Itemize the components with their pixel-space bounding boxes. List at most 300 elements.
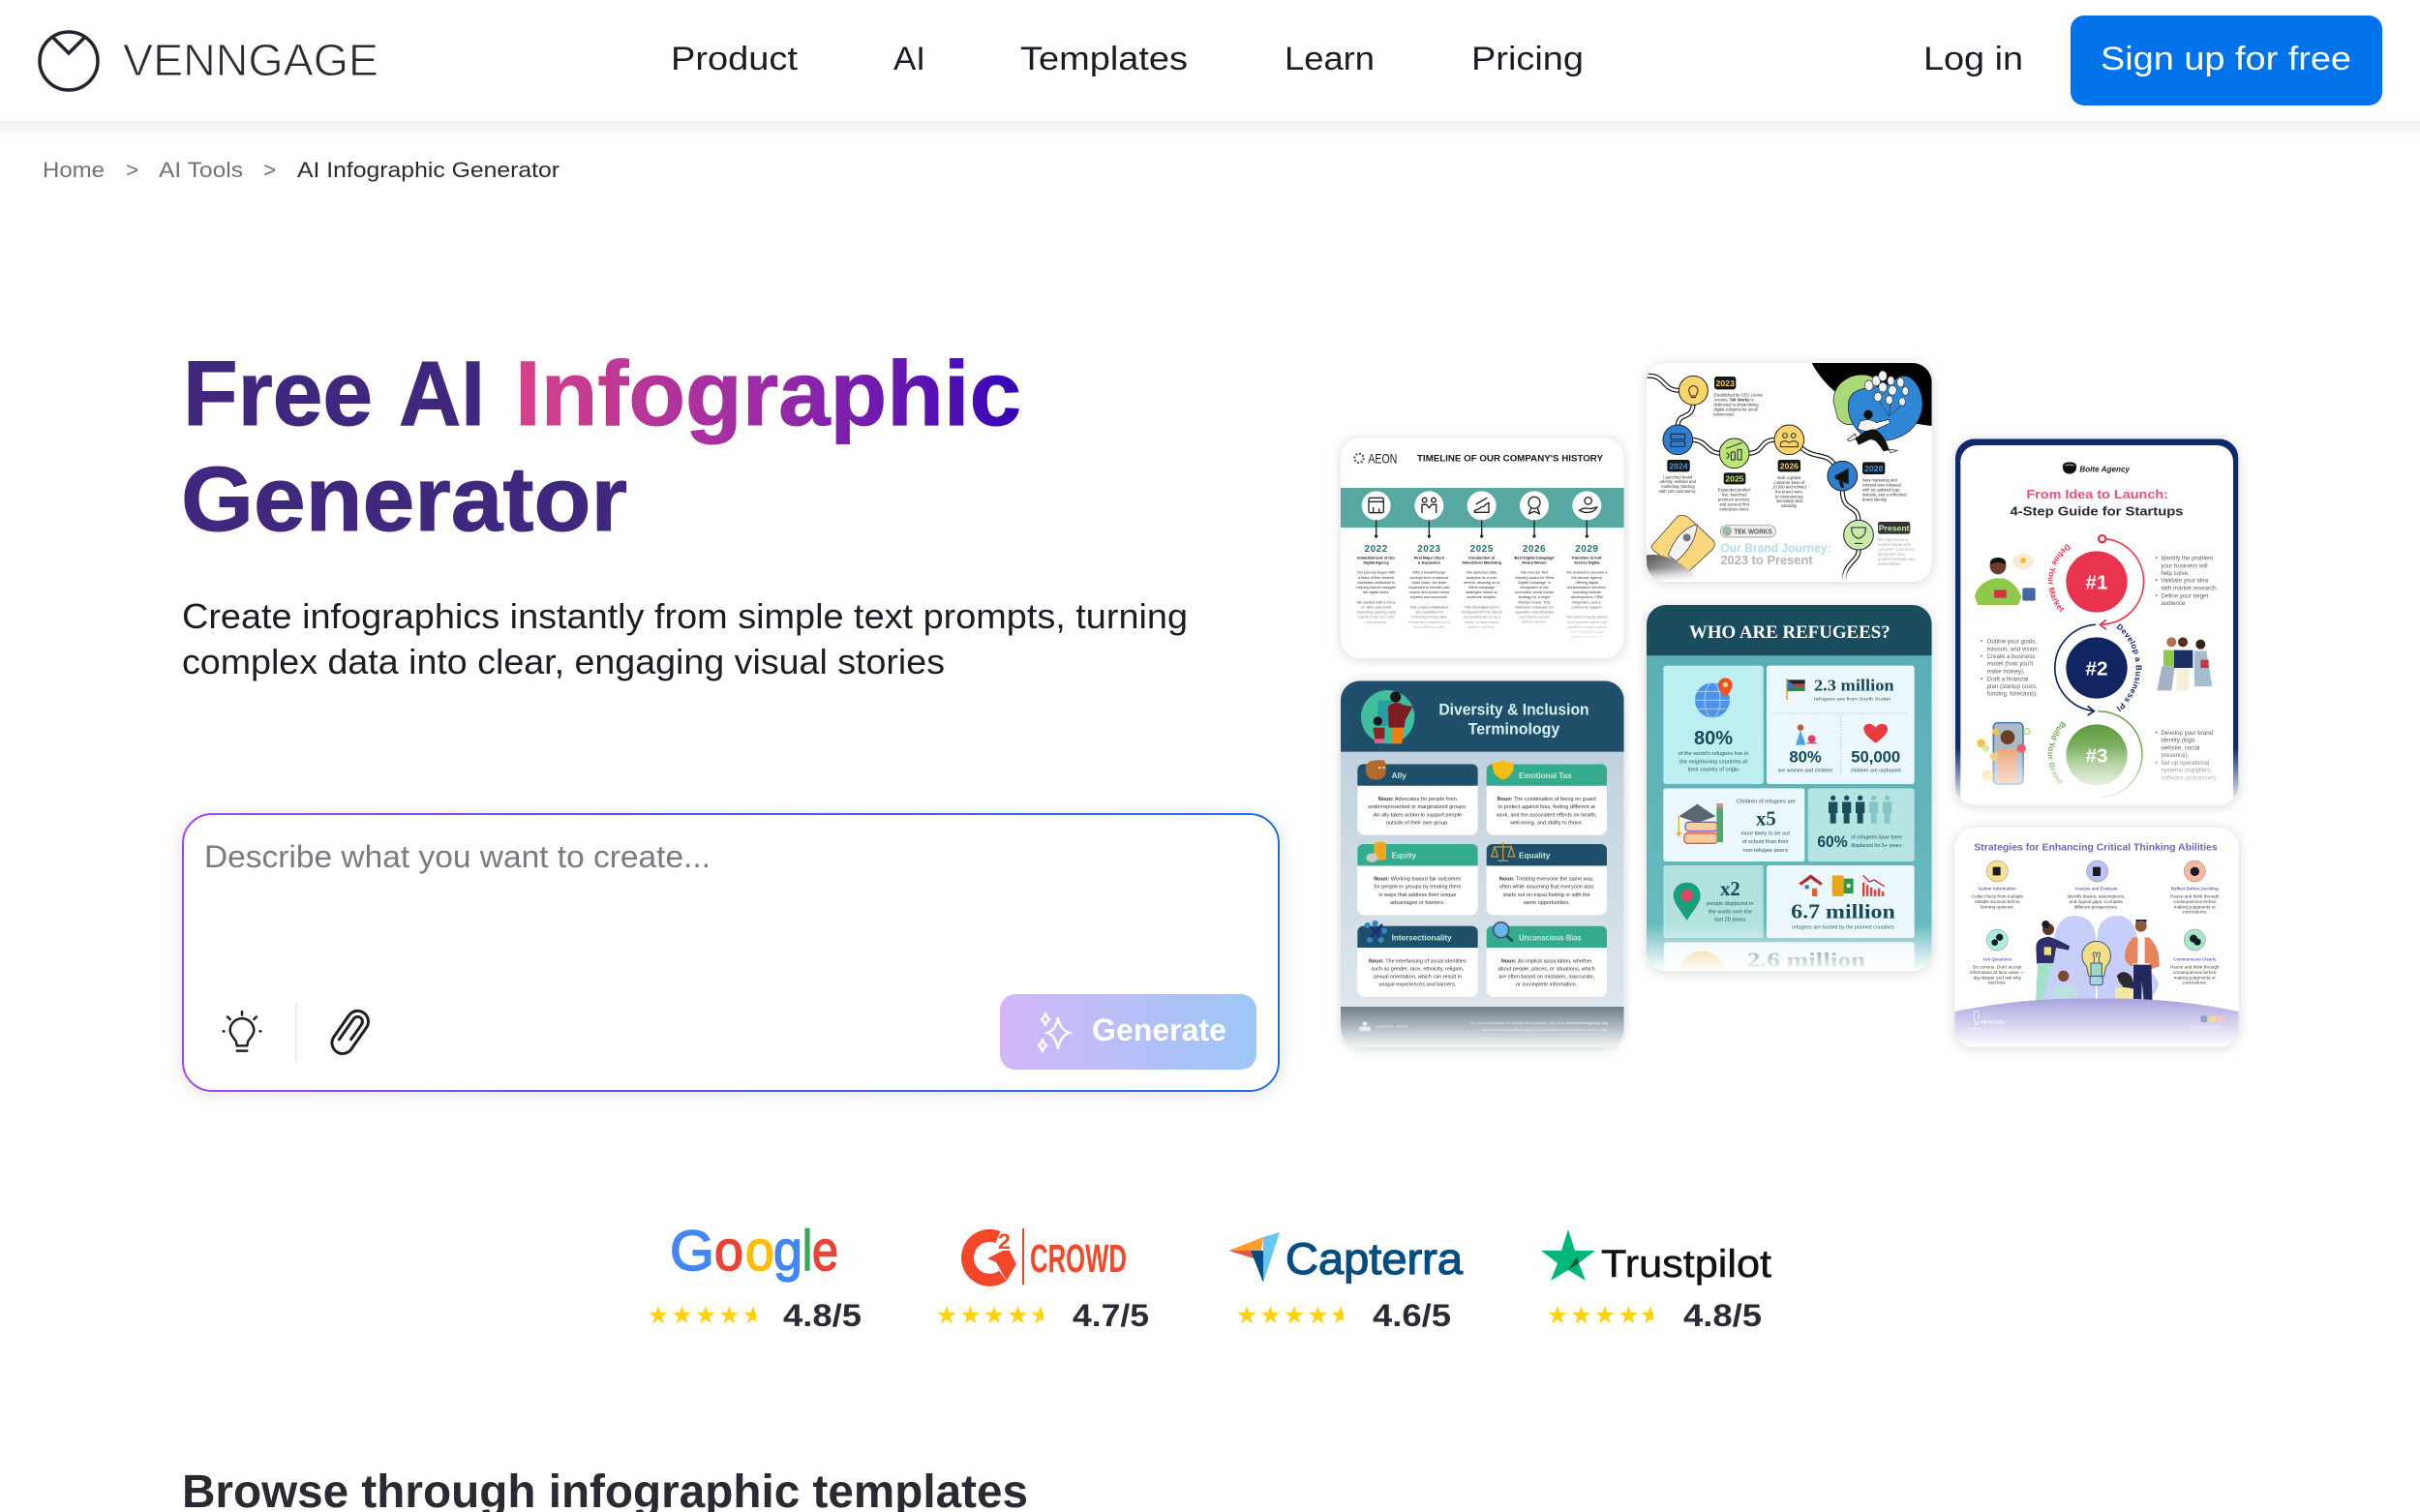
milestone descriptions: Established by CEO Louise <box>1713 393 1764 398</box>
logo: Venngage: VENNGAGE <box>123 35 378 85</box>
icon: light bulb <box>224 1012 260 1051</box>
term cards: Noun: The intertwining of social identities <box>1369 958 1467 964</box>
main navigation links: Pricing <box>1471 41 1584 77</box>
stars <box>649 1306 756 1323</box>
timeline columns: transformation services, <box>1567 586 1607 590</box>
timeline columns: digital marketing. <box>1467 625 1496 629</box>
timeline columns: a team of five creative <box>1358 576 1394 580</box>
timeline columns: our reputation for <box>1415 611 1444 615</box>
panel: critical thinking card: Collect facts from multiple <box>1972 894 2023 899</box>
illustration: man with idea <box>1975 554 2036 605</box>
milestone icons <box>1663 376 1873 550</box>
main navigation links: Product <box>671 41 799 77</box>
panel: critical thinking card: Be curious. Don't accept <box>1973 965 2022 970</box>
card footer: DIVERSITY GROUP <box>1376 1025 1408 1029</box>
timeline columns: Introduction of <box>1468 556 1496 559</box>
stat: 6.7 million hosted: 6.7 million <box>1791 901 1895 922</box>
milestone descriptions: and secured first <box>1719 502 1750 507</box>
milestone descriptions: Recognized as a <box>1878 537 1909 542</box>
card heading: Strategies for Enhancing Critical Thinking Abilities <box>1974 842 2218 853</box>
step bullet lists: Create a business <box>1987 653 2035 660</box>
step bullet lists: software, processes). <box>2161 774 2218 781</box>
panel: critical thinking card: conclusions. <box>2183 910 2207 915</box>
term cards: such as gender, race, ethnicity, religion, <box>1371 966 1465 972</box>
card heading: From Idea to Launch: <box>2026 488 2168 501</box>
milestone descriptions: with an updated logo, <box>1862 488 1901 493</box>
stars <box>1548 1306 1653 1323</box>
panel: critical thinking card <box>1954 828 2239 1047</box>
milestone descriptions: Expanded product <box>1718 488 1751 493</box>
milestone descriptions: website, and a refreshed <box>1862 493 1907 498</box>
timeline columns: offering digital <box>1575 581 1598 585</box>
panel: critical thinking card: information at face value — <box>1970 970 2025 975</box>
card heading: 4-Step Guide for Startups <box>2010 505 2183 519</box>
timeline columns: strategy for a major <box>1519 595 1551 599</box>
step 2: Develop a Business Plan <box>2116 623 2141 712</box>
header navigation bar <box>0 0 2420 142</box>
stat: times five school: Children of refugees are <box>1737 800 1796 805</box>
step bullet lists: model (how you'll <box>1987 661 2033 668</box>
term cards: Emotional Tax <box>1519 771 1572 780</box>
logo: Google: l <box>802 1220 812 1283</box>
stat: South Sudan: are women and children <box>1778 768 1832 773</box>
stat: times two displaced: the world over the <box>1709 909 1752 915</box>
card header: WHO ARE REFUGEES? <box>1689 622 1891 643</box>
illustration: team of three <box>2157 637 2212 690</box>
year labels: 2024 <box>1669 461 1688 470</box>
step 1: #1 <box>2086 571 2107 593</box>
timeline columns: expanded to include paid <box>1408 586 1450 590</box>
term cards: An ally takes action to support people <box>1374 812 1462 818</box>
logo: Google <box>670 1220 838 1283</box>
stat: times five school: non-refugee peers <box>1743 848 1788 854</box>
timeline columns: industry award for 'Best <box>1515 576 1555 580</box>
timeline columns: reputation and attracted <box>1515 610 1554 614</box>
logo: Trustpilot <box>1541 1229 1771 1285</box>
term cards: advantages or barriers. <box>1390 900 1445 906</box>
prompt input panel <box>183 814 1279 1091</box>
score: 4.8/5 <box>783 1298 862 1333</box>
card header <box>1341 680 1624 752</box>
step bullet lists: website, social <box>2160 744 2199 751</box>
timeline columns: analytics as a core <box>1467 576 1497 580</box>
term cards: Ally <box>1392 771 1407 780</box>
timeline columns: With a breakthrough <box>1412 571 1446 575</box>
milestone descriptions: enterprise client. <box>1719 507 1749 512</box>
strategy texts: Gather Information <box>1979 887 2016 892</box>
rating: Capterra <box>1228 1232 1464 1333</box>
step bullet lists: systems (suppliers, <box>2161 768 2212 774</box>
timeline columns: 2022 <box>1365 544 1388 555</box>
milestone descriptions: businesses. <box>1713 412 1735 417</box>
timeline columns: digital environment. <box>1571 635 1603 639</box>
step bullet lists: presence). <box>2161 752 2190 759</box>
main navigation links: Templates <box>1020 41 1188 77</box>
timeline columns: Digital Agency <box>1363 560 1390 564</box>
timeline columns: We started with a focus <box>1357 600 1396 604</box>
timeline columns: Our journey began with <box>1357 571 1395 575</box>
stat: South Sudan: refugees are from South Sudan <box>1814 697 1891 703</box>
timeline columns: Establishment of Our <box>1357 556 1396 559</box>
term cards: Noun: The combination of being on guard <box>1497 797 1596 802</box>
timeline columns: Data-Driven Marketing <box>1462 560 1502 564</box>
timeline columns: Award Winner <box>1522 560 1547 564</box>
timeline columns: 2029 <box>1575 544 1598 555</box>
stat: 80 percent neighbouring countries: of the world's refugees live in <box>1679 751 1748 757</box>
timeline columns: retail sectors. <box>1365 620 1387 624</box>
ground band and footer <box>1954 998 2239 1047</box>
term cards: to protect against bias, feeling different at <box>1498 804 1595 810</box>
step 2 <box>2054 623 2141 716</box>
stat: 2.6 million: 2.6 million <box>1747 950 1866 971</box>
panel: timeline infographic card <box>1341 438 1624 658</box>
stat: 80 percent neighbouring countries: the neighboring countries of <box>1679 759 1747 765</box>
timeline columns: integration, and e- <box>1572 600 1602 604</box>
milestone descriptions: the brand voice <box>1775 489 1803 494</box>
timeline columns: helping brands navigate <box>1356 586 1396 590</box>
timeline columns: search and social media <box>1409 590 1450 594</box>
timeline columns: recognition of our <box>1520 586 1550 590</box>
timeline columns: retail chain, our team <box>1411 581 1446 585</box>
rating: Google <box>649 1220 862 1333</box>
timeline columns: Digital Campaign' in <box>1518 581 1551 585</box>
milestone descriptions: to communicate <box>1775 494 1804 499</box>
generate button <box>1000 994 1256 1070</box>
timeline columns: clients in the tech and <box>1358 616 1394 620</box>
card heading: TIMELINE OF OUR COMPANY'S HISTORY <box>1417 453 1603 463</box>
step bullet lists: Set up operational <box>2161 760 2209 767</box>
brand mark: AEON <box>1353 453 1396 464</box>
step bullet lists: your business will <box>2161 562 2208 569</box>
year labels: 2023 <box>1716 378 1735 388</box>
illustration: rocket <box>1647 515 1714 581</box>
step 3: Build Your Brand <box>2048 721 2066 784</box>
card header <box>1647 605 1932 655</box>
step bullet lists: Draft a financial <box>1987 676 2028 682</box>
step bullet lists: Validate your idea <box>2161 578 2209 585</box>
stat: 60 percent displaced: displaced for 5+ years <box>1851 843 1902 849</box>
timeline columns: 2025 <box>1470 544 1494 555</box>
year labels: 2025 <box>1725 474 1744 484</box>
stat: 80 percent neighbouring countries: their country of origin <box>1688 768 1739 773</box>
timeline columns: 2026 <box>1523 544 1546 555</box>
milestone descriptions: Launched brand <box>1663 474 1693 479</box>
milestone descriptions: with 100 customers). <box>1659 489 1697 494</box>
breadcrumb <box>43 158 560 182</box>
term cards: Equity <box>1392 851 1416 861</box>
step bullet lists: audience. <box>2161 600 2187 607</box>
milestone descriptions: innovation and <box>1776 499 1803 503</box>
brand: Bolte Agency <box>2063 462 2130 474</box>
step bullet lists: funding, forecasts). <box>1987 691 2038 698</box>
strategy texts: Communicate Clearly <box>2173 957 2217 962</box>
stat: 80 percent neighbouring countries <box>1663 666 1764 784</box>
score: 4.7/5 <box>1073 1298 1149 1333</box>
term cards: Noun: Working toward fair outcomes <box>1374 877 1461 883</box>
main navigation links: Learn <box>1285 41 1375 77</box>
term cards: Intersectionality <box>1392 932 1452 942</box>
timeline columns: innovative social media <box>1515 590 1555 594</box>
step 1 <box>2048 534 2145 630</box>
panel: critical thinking card: different perspectives. <box>2074 904 2118 909</box>
panel: brand journey card <box>1647 363 1932 582</box>
timeline columns: new clients across <box>1519 616 1550 620</box>
step 3 <box>2048 711 2143 798</box>
milestone descriptions: 100,000+ customers, <box>1878 547 1916 552</box>
subtitle text block: complex data into clear, engaging visual stories <box>182 642 945 681</box>
icon: sparkles <box>1039 1013 1070 1052</box>
panel: critical thinking card: and logical gaps. Compare <box>2070 899 2123 904</box>
term cards: sexual orientation, which can result in <box>1374 975 1462 981</box>
stat: times five school: of school than their <box>1742 839 1789 845</box>
panel: who are refugees card <box>1647 605 1932 998</box>
milestone descriptions: line, launched <box>1722 493 1747 498</box>
timeline columns: solutions to help brands <box>1567 625 1607 629</box>
year labels: 2028 <box>1864 464 1883 473</box>
term cards: about people, places, or situations, which <box>1498 966 1595 972</box>
stat: South Sudan: 50,000 <box>1851 747 1900 766</box>
brand: Bolte Agency: Bolte Agency <box>2079 464 2130 473</box>
rating: G2 Crowd <box>937 1228 1149 1333</box>
stat: 6.7 million hosted <box>1767 865 1915 938</box>
timeline columns: leader in data-driven <box>1465 620 1498 624</box>
milestone descriptions: premium services, <box>1718 498 1751 502</box>
icon: paperclip <box>328 1007 373 1058</box>
step bullet lists: • <box>2156 730 2158 737</box>
term cards <box>1357 759 1607 997</box>
stat: times two displaced <box>1663 865 1764 938</box>
step bullet lists: Develop your brand <box>2161 730 2214 737</box>
milestone descriptions: along with new <box>1878 552 1905 557</box>
ground band and footer: HR BLOCK <box>1981 1020 2006 1025</box>
step bullet lists: Identify the problem <box>2161 555 2213 561</box>
logo: Google: o <box>745 1220 774 1283</box>
brand: Tek Works: TEK WORKS <box>1734 529 1772 535</box>
panel: critical thinking card: Pause and think through <box>2170 894 2220 899</box>
panel: critical thinking card: consequences before <box>2173 899 2217 904</box>
stat: times two displaced: x2 <box>1720 879 1740 900</box>
milestone descriptions: reliability. <box>1781 503 1798 508</box>
score: 4.8/5 <box>1683 1298 1762 1333</box>
milestone descriptions: product verticals and <box>1878 557 1916 561</box>
panel: critical thinking card: reliable sources before <box>1975 899 2020 904</box>
term cards: Unconscious Bias <box>1519 932 1582 942</box>
illustration: runner with balloons <box>1812 363 1932 453</box>
card header: Diversity & Inclusion <box>1438 700 1589 718</box>
step bullet lists: make money). <box>1987 668 2025 675</box>
timeline columns: service, allowing us to <box>1464 581 1499 585</box>
panel: diversity and inclusion card <box>1341 680 1624 1047</box>
panel: critical thinking card: dig deeper and ask why <box>1974 975 2022 980</box>
logo: Capterra: Capterra <box>1286 1234 1464 1284</box>
timeline icons <box>1362 491 1601 538</box>
timeline columns <box>1356 544 1608 639</box>
strategy texts: Ask Questions <box>1982 957 2012 962</box>
sign up button: Sign up for free <box>2101 41 2351 77</box>
timeline columns: Service Digital <box>1574 560 1600 564</box>
milestone descriptions: brand identity. <box>1862 498 1888 502</box>
logo: G2 Crowd <box>968 1228 1127 1285</box>
title: Infographic <box>515 343 1021 445</box>
stat: 6.7 million hosted: refugees are hosted by the poorest countries <box>1792 924 1894 930</box>
breadcrumb: AI Infographic Generator <box>297 158 560 182</box>
term cards: Noun: An implicit association, whether <box>1501 958 1591 964</box>
step bullet lists: help solve. <box>2161 570 2190 577</box>
panel: critical thinking card: forming opinions. <box>1981 904 2014 909</box>
term cards: starts out on equal footing or with the <box>1503 892 1590 898</box>
strategy texts: Reflect Before Deciding <box>2171 887 2219 892</box>
illustration: brain shape and light bulb <box>2036 916 2159 1016</box>
timeline columns: increased ROI for clients <box>1462 611 1502 615</box>
milestone descriptions: rebrand was released <box>1862 483 1902 488</box>
timeline columns: Transition to Full- <box>1571 556 1603 559</box>
timeline columns: First Major Client <box>1414 556 1445 559</box>
sign up button <box>2071 15 2382 106</box>
stat: times five school: more likely to be out <box>1740 832 1790 837</box>
rating: Trustpilot <box>1541 1229 1771 1333</box>
generate button: Generate <box>1092 1013 1226 1047</box>
logo: G2 Crowd: 2 <box>998 1229 1011 1254</box>
year labels: 2026 <box>1780 461 1799 470</box>
step bullet lists: • <box>2156 578 2158 585</box>
stat: 80 percent neighbouring countries: 80% <box>1694 728 1733 749</box>
timeline columns: commerce support. <box>1571 605 1603 609</box>
milestone descriptions: Built a global <box>1777 475 1800 480</box>
timeline columns: 2023 <box>1417 544 1440 555</box>
stars <box>937 1306 1044 1323</box>
card header: Terminology <box>1468 720 1560 739</box>
term cards: for people or groups by treating them <box>1374 885 1462 891</box>
stat: South Sudan: children are orphaned <box>1851 768 1901 773</box>
step bullet lists: • <box>2156 592 2158 599</box>
stat: 60 percent displaced: of refugees have been <box>1851 835 1902 841</box>
card footer: Source: https://www.catalyst.org/2015/05/28/diversity-inclusion-terms-you-need-to-know/ <box>1482 1028 1608 1032</box>
timeline columns: on SEO and email <box>1361 605 1391 609</box>
illustration: four people <box>2036 920 2160 1021</box>
step 2: #2 <box>2086 657 2107 680</box>
teal band <box>1341 488 1624 528</box>
logo: Google: o <box>714 1220 743 1283</box>
stat: times two displaced: last 20 years <box>1714 918 1746 923</box>
step bullet lists: plan (startup costs, <box>1987 683 2038 690</box>
panel: critical thinking card: making judgments or <box>2174 904 2216 909</box>
strategy texts: Analyze and Evaluate <box>2074 887 2118 892</box>
score: 4.6/5 <box>1373 1298 1451 1333</box>
timeline columns: lifestyle brand. This <box>1519 600 1551 604</box>
step bullet lists: identity (logo, <box>2161 738 2196 744</box>
breadcrumb: > <box>263 158 276 182</box>
panel: critical thinking card: making judgments or <box>2174 975 2216 980</box>
stat: South Sudan: 2.3 million <box>1814 677 1894 695</box>
strategy texts <box>1979 887 2219 962</box>
step bullet lists: • <box>2156 760 2158 767</box>
subtitle text block: Create infographics instantly from simple text prompts, turning <box>182 596 1188 636</box>
timeline columns: strategies based on <box>1466 590 1497 594</box>
stat: 60 percent displaced <box>1808 788 1915 862</box>
logo: Trustpilot: Trustpilot <box>1601 1243 1771 1285</box>
breadcrumb: Home <box>43 158 105 182</box>
main navigation links: AI <box>893 41 925 77</box>
milestone descriptions: marketing (starting <box>1661 484 1695 489</box>
step 3: #3 <box>2086 744 2107 767</box>
timeline columns: the digital world. <box>1363 590 1390 594</box>
brand: Tek Works <box>1720 526 1775 537</box>
log in link: Log in <box>1923 41 2023 77</box>
card heading <box>1721 543 1830 564</box>
main navigation links <box>671 41 1584 77</box>
logo: Google: G <box>670 1220 714 1283</box>
term cards: Noun: Treating everyone the same way, <box>1499 877 1594 883</box>
timeline columns: milestone bolstered our <box>1515 605 1555 609</box>
timeline columns: diverse sectors. <box>1522 620 1547 624</box>
term cards: or incomplete information. <box>1516 983 1578 988</box>
timeline columns: delivering measurable <box>1411 616 1447 620</box>
panel: critical thinking card: and how. <box>1988 981 2007 985</box>
step 1: Define Your Market <box>2048 544 2072 613</box>
stat: South Sudan <box>1767 666 1915 784</box>
milestone descriptions: partnerships. <box>1878 561 1901 566</box>
stat: South Sudan: 80% <box>1789 747 1822 766</box>
step bullet lists: • <box>1981 676 1982 682</box>
timeline columns: hire additional staff. <box>1413 625 1445 629</box>
timeline columns: contract from a national <box>1409 576 1448 580</box>
stat: times five school: x5 <box>1756 808 1776 830</box>
timeline columns: audience insights. <box>1467 595 1497 599</box>
step bullet lists: with market research. <box>2160 586 2218 592</box>
step bullet lists <box>1981 555 2218 781</box>
timeline columns: This innovation led to <box>1465 605 1499 609</box>
term cards: Noun: Advocates for people from <box>1378 797 1457 802</box>
logo: Google: e <box>812 1220 838 1283</box>
step bullet lists: Outline your goals, <box>1987 638 2037 645</box>
timeline columns: including website <box>1573 590 1601 594</box>
timeline columns: results and enabled us to <box>1408 620 1450 624</box>
milestone descriptions: digital solutions for small <box>1713 408 1758 412</box>
logo: G2 Crowd: CROWD <box>1030 1236 1127 1281</box>
milestone descriptions: identity, website and <box>1660 479 1697 484</box>
card heading: 2023 to Present <box>1720 553 1813 567</box>
stat: 60 percent displaced: 60% <box>1817 832 1848 851</box>
stat: 2.6 million <box>1664 942 1915 972</box>
timeline columns: This project established <box>1409 605 1448 609</box>
term cards: outside of their own group. <box>1386 820 1449 826</box>
milestone descriptions: 10,000 and refined <box>1772 485 1806 490</box>
step bullet lists: • <box>2156 555 2158 561</box>
milestone descriptions: dedicated to streamlining <box>1713 403 1759 408</box>
step bullet lists: • <box>1981 653 1982 660</box>
term cards: are often based on mistaken, inaccurate, <box>1498 975 1595 981</box>
term cards: well-being, and ability to thrive. <box>1509 820 1584 826</box>
timeline road <box>1648 376 1859 581</box>
logo: Google: g <box>773 1220 802 1283</box>
milestone descriptions: Antonio, Tek Works is <box>1713 398 1754 403</box>
step bullet lists: Define your target <box>2161 592 2209 599</box>
card heading <box>2010 488 2183 519</box>
timeline columns: excel in a fast-paced <box>1570 630 1604 634</box>
ground band and footer: @reallygreatsite <box>2190 1024 2221 1029</box>
timeline columns: 'Best Digital Campaign' <box>1514 556 1555 559</box>
timeline columns: We won our first <box>1521 571 1549 575</box>
term cards: underrepresented or marginalized groups. <box>1368 804 1467 810</box>
timeline columns: development, CRM <box>1571 595 1603 599</box>
illustration: phone with influencer <box>1977 723 2030 784</box>
timeline columns: & Expansion <box>1418 560 1441 564</box>
timeline columns: We launched data <box>1467 571 1497 575</box>
logo: Capterra <box>1228 1232 1464 1284</box>
stars <box>1237 1306 1344 1323</box>
term cards: in ways that address their unique <box>1378 892 1456 898</box>
timeline columns: This latest chapter allows <box>1566 616 1608 620</box>
